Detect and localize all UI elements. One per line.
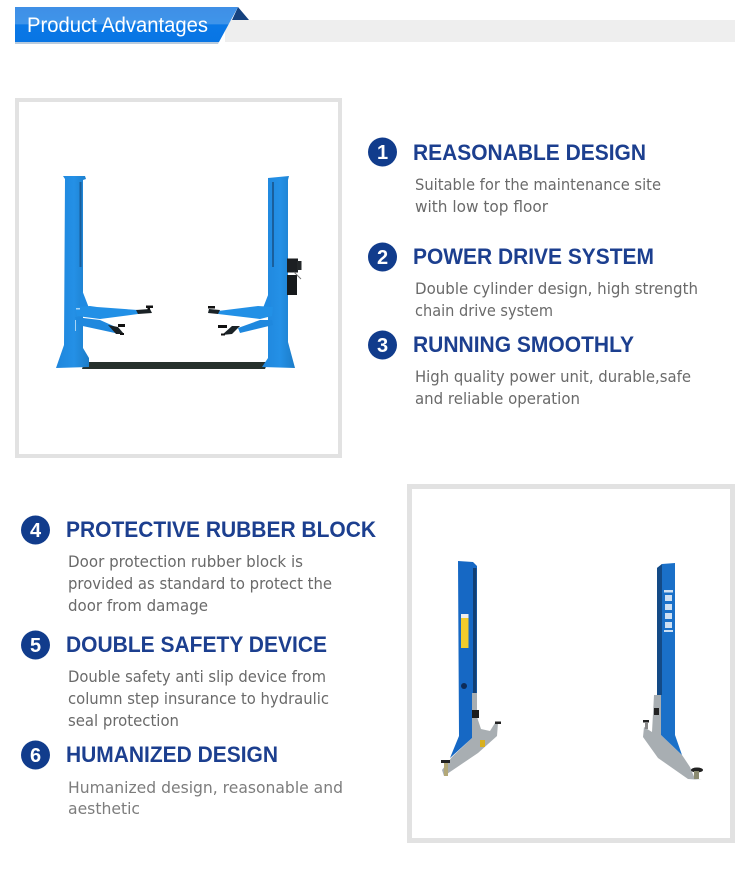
left upper arm bbox=[75, 306, 138, 319]
heading 2: POWER DRIVE SYSTEM bbox=[413, 244, 654, 269]
right lower arm bbox=[238, 320, 273, 333]
badge 1 bbox=[368, 138, 397, 166]
badge 5 bbox=[21, 630, 50, 660]
panel: separated columns photo bbox=[410, 486, 732, 840]
right column with lettering bbox=[643, 563, 703, 780]
heading 6: HUMANIZED DESIGN bbox=[66, 742, 278, 767]
body 5: column step insurance to hydraulic bbox=[68, 689, 329, 708]
badge 5: 5 bbox=[30, 635, 41, 657]
body 5 bbox=[68, 667, 329, 730]
floor plate bbox=[82, 362, 268, 369]
body 2 bbox=[415, 279, 698, 320]
post hole bbox=[461, 683, 467, 689]
heading 4: PROTECTIVE RUBBER BLOCK bbox=[66, 517, 376, 542]
left brace bbox=[79, 290, 89, 316]
badge 3 bbox=[368, 330, 397, 360]
header title: Product Advantages bbox=[27, 14, 208, 37]
feature 4 bbox=[21, 516, 376, 615]
lift illustration bbox=[56, 176, 302, 369]
badge 6: 6 bbox=[30, 745, 41, 767]
grey foot bbox=[442, 693, 498, 776]
heading 3: RUNNING SMOOTHLY bbox=[413, 332, 634, 357]
body 4: door from damage bbox=[68, 596, 208, 615]
blue post bbox=[657, 563, 682, 755]
body 2: chain drive system bbox=[415, 301, 553, 320]
header: Product Advantages bbox=[15, 7, 735, 44]
badge 4: 4 bbox=[30, 520, 42, 542]
body 1 bbox=[415, 175, 661, 216]
body 4: Door protection rubber block is bbox=[68, 552, 303, 571]
badge 1: 1 bbox=[377, 142, 388, 164]
grey foot bbox=[643, 695, 702, 780]
feature 6 bbox=[21, 740, 343, 818]
body 3: and reliable operation bbox=[415, 389, 580, 408]
feature 3 bbox=[368, 330, 691, 408]
body 3 bbox=[415, 367, 691, 408]
heading 1: REASONABLE DESIGN bbox=[413, 140, 646, 165]
feature 5 bbox=[21, 630, 329, 730]
right upper arm bbox=[218, 306, 273, 319]
body 3: High quality power unit, durable,safe bbox=[415, 367, 691, 386]
left column bbox=[56, 176, 153, 368]
badge 2 bbox=[368, 242, 397, 272]
badge 4 bbox=[21, 516, 50, 544]
left highlights bbox=[75, 320, 76, 331]
photo frame bbox=[410, 486, 732, 840]
body 5: Double safety anti slip device from bbox=[68, 667, 326, 686]
body 6: aesthetic bbox=[68, 799, 140, 818]
photo frame bbox=[17, 100, 340, 456]
warning label bbox=[461, 618, 468, 648]
header grey band bbox=[225, 20, 735, 42]
right brace bbox=[263, 290, 272, 316]
body 5: seal protection bbox=[68, 711, 179, 730]
left lower arm bbox=[75, 317, 118, 333]
white lettering on post bbox=[664, 590, 673, 632]
hydraulic power unit bbox=[287, 258, 302, 295]
body 6 bbox=[68, 778, 343, 818]
panel: two post lift photo bbox=[17, 100, 340, 456]
body 6: Humanized design, reasonable and bbox=[68, 778, 343, 797]
body 1: with low top floor bbox=[415, 197, 548, 216]
badge 6 bbox=[21, 740, 50, 770]
body 1: Suitable for the maintenance site bbox=[415, 175, 661, 194]
badge 2: 2 bbox=[377, 247, 388, 269]
right column bbox=[208, 176, 302, 368]
heading 5: DOUBLE SAFETY DEVICE bbox=[66, 632, 327, 657]
header banner bbox=[15, 7, 238, 42]
badge 3: 3 bbox=[377, 335, 388, 357]
header fold triangle bbox=[232, 7, 249, 20]
body 2: Double cylinder design, high strength bbox=[415, 279, 698, 298]
feature 2 bbox=[368, 242, 698, 320]
left column with label bbox=[441, 561, 501, 776]
body 4: provided as standard to protect the bbox=[68, 574, 332, 593]
body 4 bbox=[68, 552, 332, 615]
banner shadow bbox=[15, 42, 219, 44]
feature 1 bbox=[368, 138, 661, 216]
blue post bbox=[450, 561, 477, 758]
